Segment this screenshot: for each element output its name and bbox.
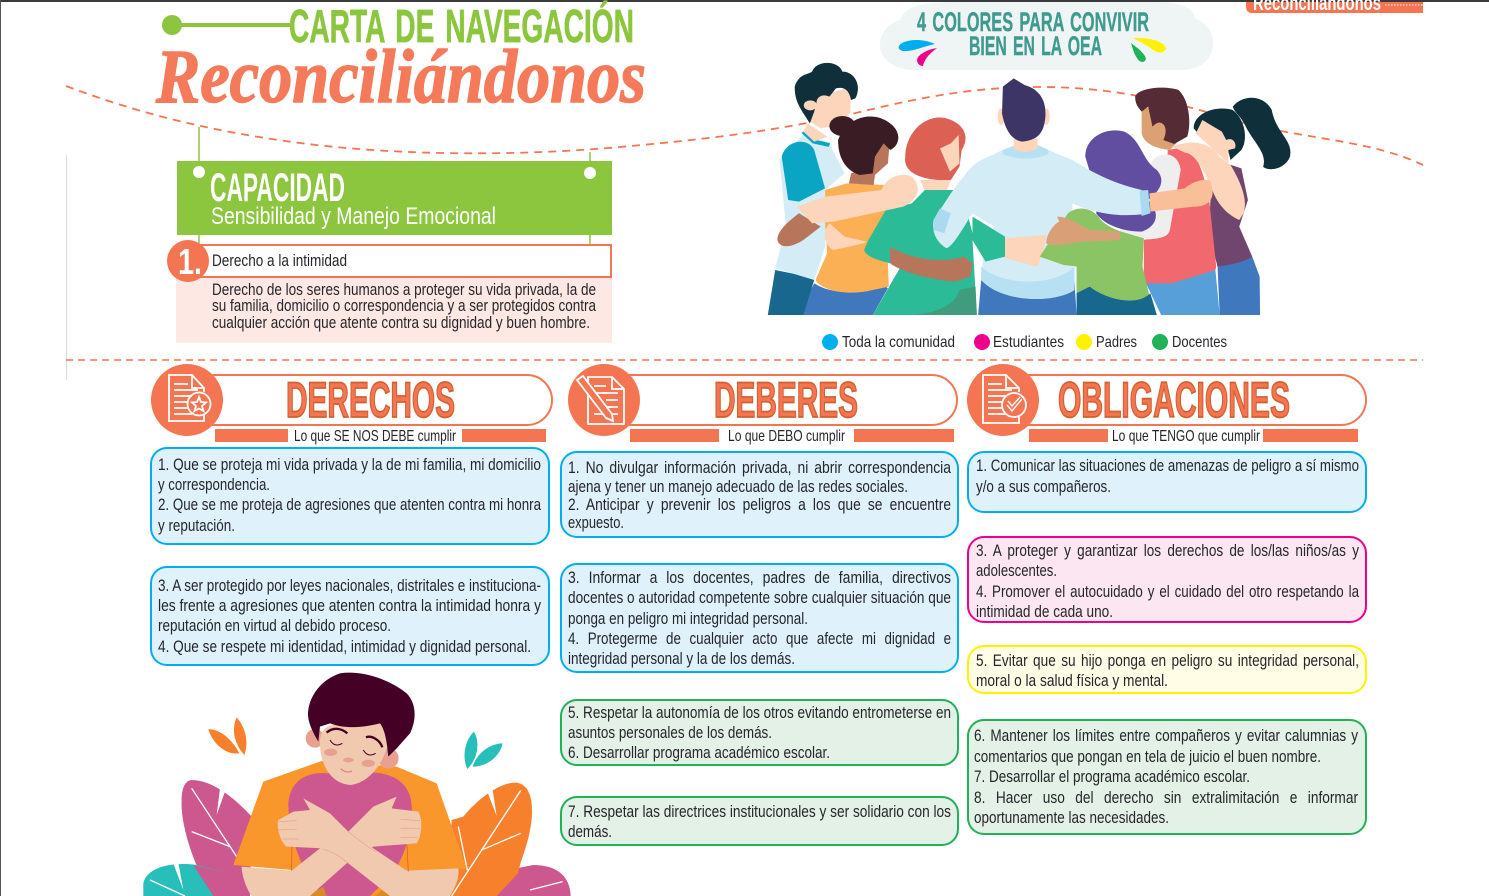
obligaciones box 2: intimidad de cada uno. (976, 603, 1113, 621)
derechos box 1: y reputación. (158, 517, 235, 535)
panel: capacidad: CAPACIDAD (210, 166, 345, 210)
obligaciones box 2 (968, 537, 1366, 622)
derechos box 1: 1. Que se proteja mi vida privada y la de mi familia, mi domicilio (158, 456, 541, 474)
deberes box 3: 6. Desarrollar programa académico escolar. (568, 744, 830, 762)
derechos box 1: y correspondencia. (158, 476, 270, 494)
derechos box 2: reputación en virtud al debido proceso. (158, 617, 391, 635)
obligaciones box 3: moral o la salud física y mental. (976, 672, 1168, 690)
title: carta de navegación (162, 0, 634, 52)
panel: derecho a la intimidad: 1. (178, 241, 202, 282)
dashed curve (66, 86, 1423, 165)
obligaciones box 4: 6. Mantener los límites entre compañeros y evitar calumnias y (974, 727, 1359, 745)
obligaciones box 4: oportunamente las necesidades. (974, 809, 1169, 827)
obligaciones box 4: 8. Hacer uso del derecho sin extralimitación e informar (974, 789, 1358, 807)
derechos box 2 (151, 567, 549, 665)
deberes box 4 (561, 797, 958, 845)
panel: derecho a la intimidad (167, 240, 612, 343)
panel: capacidad (177, 127, 612, 246)
illustration: boy hugging himself with leaves (143, 673, 571, 896)
deberes box 2: 3. Informar a los docentes, padres de familia, directivos (568, 569, 951, 587)
legend: Estudiantes (993, 334, 1064, 351)
heading: derechos (151, 364, 552, 445)
derechos box 2: 3. A ser protegido por leyes nacionales, distritales e instituciona- (158, 577, 541, 595)
legend: Padres (1096, 334, 1137, 351)
deberes box 2: integridad personal y la de los demás. (568, 650, 795, 668)
heading: deberes (568, 364, 957, 445)
obligaciones box 3 (968, 646, 1366, 693)
obligaciones box 4 (968, 720, 1366, 834)
heading: obligaciones: OBLIGACIONES (1058, 372, 1290, 428)
obligaciones box 3: 5. Evitar que su hijo ponga en peligro su integridad personal, (976, 652, 1359, 670)
heading: derechos: Lo que SE NOS DEBE cumplir (294, 428, 456, 445)
deberes box 3: asuntos personales de los demás. (568, 724, 772, 742)
icon: color drops (899, 38, 1166, 66)
panel: derecho a la intimidad: su familia, domicilio o correspondencia y a ser protegidos contra (212, 296, 596, 315)
heading: deberes: DEBERES (714, 372, 858, 428)
deberes box 1: 2. Anticipar y prevenir los peligros a los que se encuentre (568, 496, 951, 514)
obligaciones box 1: y/o a sus compañeros. (976, 478, 1111, 496)
icon: document with pencil (577, 376, 624, 424)
deberes box 1: 1. No divulgar información privada, ni abrir correspondencia (568, 459, 952, 477)
derechos box 2: les frente a agresiones que atenten contra la intimidad honra y (158, 597, 542, 615)
deberes box 4: 7. Respetar las directrices institucionales y ser solidario con los (568, 803, 951, 821)
illustration: group of people hugging (768, 63, 1290, 315)
legend: Docentes (1172, 334, 1227, 351)
cloud: 4 colores: 4 COLORES PARA CONVIVIR (917, 7, 1149, 37)
legend (822, 334, 1227, 351)
deberes box 1: ajena y tener un manejo adecuado de las redes sociales. (568, 478, 908, 496)
deberes box 3: 5. Respetar la autonomía de los otros evitando entrometerse en (568, 704, 951, 722)
legend: Toda la comunidad (842, 334, 955, 351)
panel: derecho a la intimidad: Derecho de los seres humanos a proteger su vida privada, la de (212, 280, 596, 299)
derechos box 1 (151, 448, 549, 544)
cloud: 4 colores (880, 2, 1213, 70)
derechos box 1: 2. Que se me proteja de agresiones que atenten contra mi honra (158, 496, 542, 514)
obligaciones box 1 (968, 452, 1366, 512)
cloud: 4 colores: BIEN EN LA OEA (969, 31, 1102, 61)
deberes box 1: expuesto. (568, 514, 624, 532)
heading: derechos: DERECHOS (286, 372, 455, 428)
icon: document with check (983, 375, 1026, 423)
deberes box 2: 4. Protegerme de cualquier acto que afecte mi dignidad e (568, 630, 951, 648)
icon: document with star (169, 375, 210, 421)
deberes box 4: demás. (568, 823, 612, 841)
obligaciones box 1: 1. Comunicar las situaciones de amenazas de peligro a sí mismo (976, 457, 1359, 475)
heading: deberes: Lo que DEBO cumplir (728, 428, 846, 445)
deberes box 3 (561, 700, 958, 765)
obligaciones box 4: comentarios que pongan en tela de juicio el buen nombre. (974, 748, 1321, 766)
deberes box 2 (561, 564, 958, 672)
obligaciones box 2: 3. A proteger y garantizar los derechos de los/las niños/as y (976, 542, 1360, 560)
deberes box 2: docentes o autoridad competente sobre cualquier situación que (568, 589, 951, 607)
derechos box 2: 4. Que se respete mi identidad, intimidad y dignidad personal. (158, 638, 531, 656)
deberes box 1 (561, 452, 958, 537)
heading: obligaciones: Lo que TENGO que cumplir (1112, 428, 1260, 445)
obligaciones box 4: 7. Desarrollar el programa académico escolar. (974, 768, 1250, 786)
obligaciones box 2: 4. Promover el autocuidado y el cuidado del otro respetando la (976, 583, 1360, 601)
obligaciones box 2: adolescentes. (976, 562, 1057, 580)
heading: obligaciones (967, 364, 1366, 445)
deberes box 2: ponga en peligro mi integridad personal. (568, 610, 808, 628)
panel: derecho a la intimidad: Derecho a la intimidad (212, 251, 347, 270)
panel: capacidad: Sensibilidad y Manejo Emocional (211, 203, 496, 230)
title: carta de navegación: CARTA DE NAVEGACIÓN (289, 0, 634, 52)
panel: derecho a la intimidad: cualquier acción que atente contra su dignidad y buen hombre. (212, 313, 590, 332)
title: reconciliándonos: Reconciliándonos (155, 35, 646, 119)
